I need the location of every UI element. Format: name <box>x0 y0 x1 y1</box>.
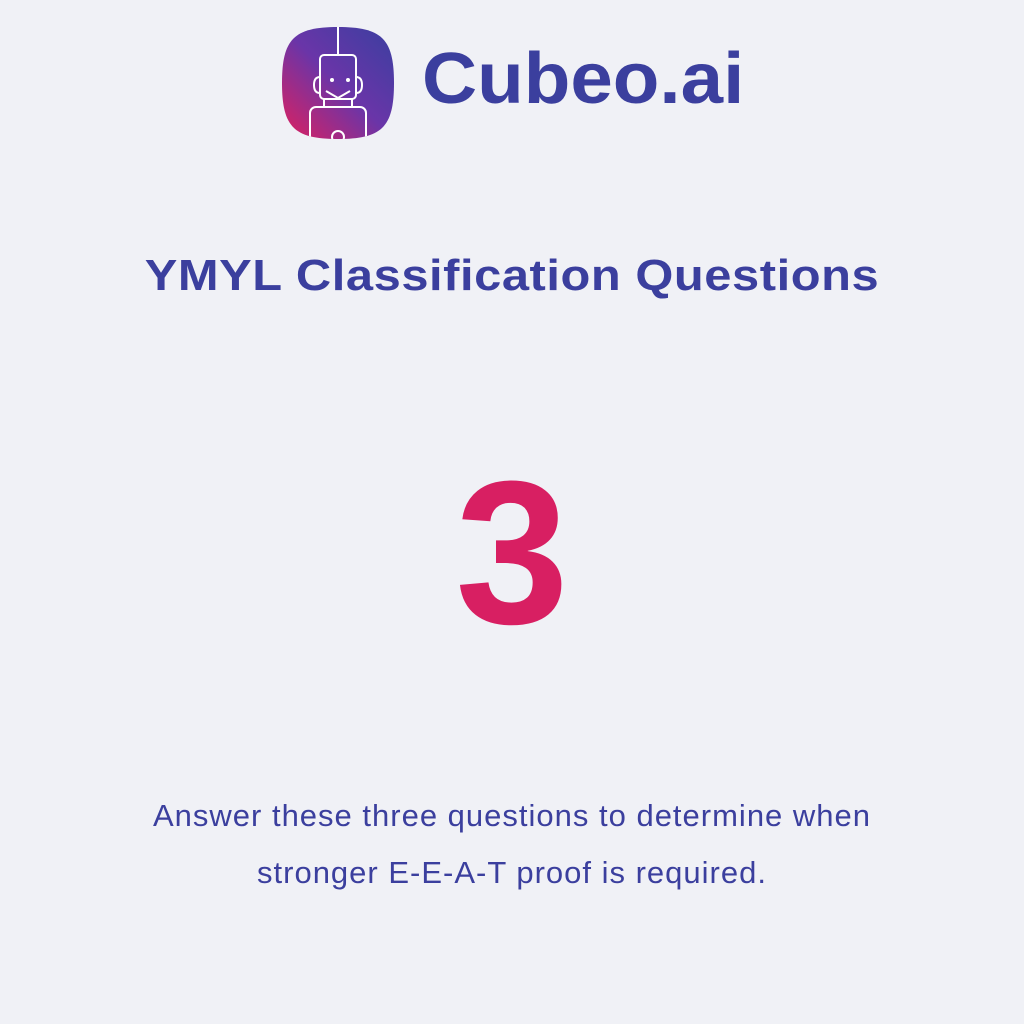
description: stronger E-E-A-T proof is required. <box>257 855 767 890</box>
title: YMYL Classification Questions <box>145 251 879 300</box>
description <box>153 798 871 890</box>
icon: robot <box>282 27 394 139</box>
logo <box>282 27 744 139</box>
brand name: Cubeo.ai <box>422 39 744 119</box>
description: Answer these three questions to determine when <box>153 798 871 833</box>
big number: 3 <box>455 439 569 667</box>
